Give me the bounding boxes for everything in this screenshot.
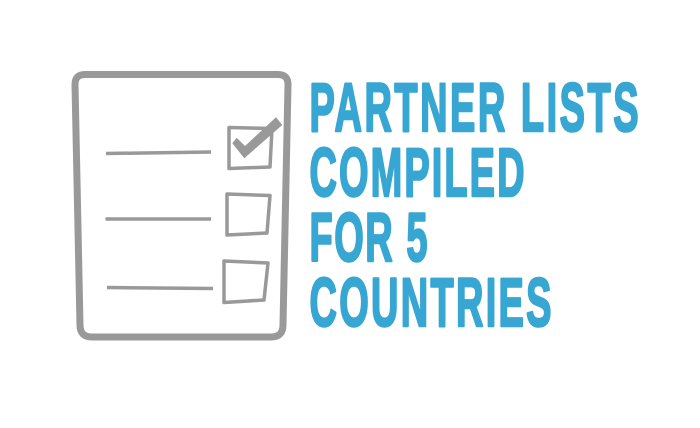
heading line 4: COUNTRIES <box>310 264 552 341</box>
icon: check mark <box>232 117 282 158</box>
list line 1 <box>106 152 211 154</box>
checkbox 2 <box>227 194 270 235</box>
list line 2 <box>106 217 211 221</box>
list line 3 <box>107 288 213 289</box>
heading line 1: PARTNER LISTS <box>310 69 639 146</box>
checkbox 1 <box>229 128 272 168</box>
checkbox 3 <box>224 261 268 302</box>
heading <box>310 69 639 341</box>
heading line 3: FOR 5 <box>310 199 427 276</box>
heading line 2: COMPILED <box>310 134 524 211</box>
icon: checklist clipboard <box>75 74 288 337</box>
clipboard outline <box>75 74 288 337</box>
